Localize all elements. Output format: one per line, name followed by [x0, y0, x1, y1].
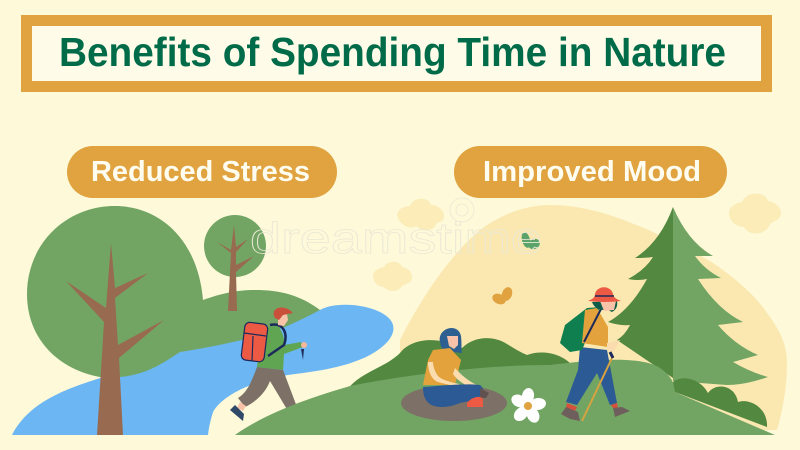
label: improved mood: Improved Mood	[483, 156, 701, 188]
pale yellow hill	[400, 205, 787, 432]
fir tree	[608, 207, 768, 385]
watermark	[250, 198, 542, 263]
watermark: dreamstime	[250, 214, 542, 263]
right bushes	[673, 378, 767, 427]
walking hiker with hat	[560, 287, 630, 421]
scene: nature illustration	[12, 194, 787, 435]
flower	[509, 387, 547, 425]
title banner: Benefits of Spending Time in Nature	[59, 29, 726, 75]
small tree	[204, 215, 266, 311]
butterfly: orange	[491, 286, 514, 306]
label: improved mood	[454, 146, 727, 198]
butterfly: green	[520, 231, 542, 251]
dark bushes	[347, 338, 572, 392]
cloud: upper left	[397, 199, 444, 230]
hiker with red backpack	[230, 308, 307, 421]
large tree and hill	[27, 206, 320, 435]
rock	[401, 385, 507, 421]
title banner	[26, 20, 766, 86]
seated woman	[423, 328, 489, 407]
label: reduced stress: Reduced Stress	[91, 156, 310, 188]
ground	[235, 360, 775, 435]
cloud: lower left	[373, 262, 412, 291]
river	[12, 305, 393, 435]
cloud: upper right	[729, 194, 781, 233]
label: reduced stress	[67, 146, 337, 198]
